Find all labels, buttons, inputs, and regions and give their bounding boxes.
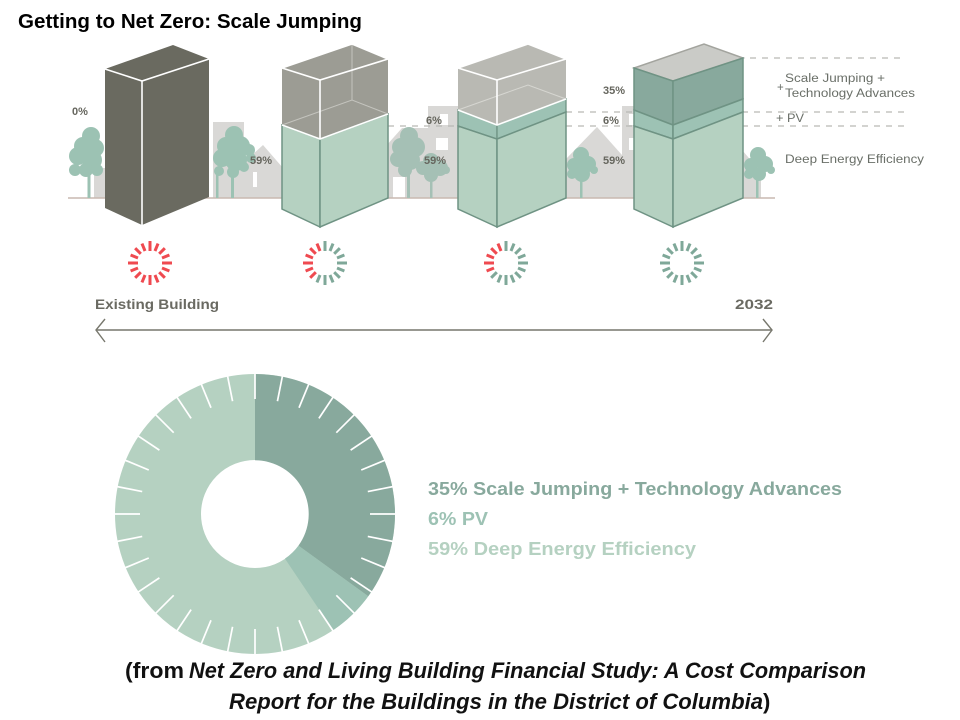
- progress gauge 4: all green: [660, 241, 704, 285]
- source caption: ): [763, 689, 770, 714]
- key labels, right of buildings: [776, 73, 924, 166]
- timeline end label: 2032: [735, 296, 773, 312]
- percentage labels on buildings: 59%: [250, 155, 272, 167]
- building 3: efficiency plus PV: [458, 44, 566, 227]
- donut legend: 35% Scale Jumping + Technology Advances: [428, 479, 842, 499]
- white tick marks: [114, 373, 396, 655]
- source caption: (from: [125, 658, 184, 683]
- trees: [69, 126, 775, 198]
- percentage labels on buildings: [72, 85, 625, 167]
- percentage labels on buildings: 35%: [603, 85, 625, 97]
- segment: 6% PV: [285, 546, 368, 630]
- percentage labels on buildings: 59%: [603, 155, 625, 167]
- donut chart: [114, 373, 396, 655]
- building 1: existing building: [105, 45, 209, 225]
- progress gauge 1: all red: [128, 241, 172, 285]
- percentage labels on buildings: 6%: [426, 115, 442, 127]
- segment: 59% deep energy efficiency: [158, 417, 352, 611]
- percentage labels on buildings: 6%: [603, 115, 619, 127]
- donut legend: 6% PV: [428, 509, 488, 529]
- dashed level lines: [388, 58, 905, 126]
- key labels, right of buildings: +: [777, 82, 784, 94]
- key labels, right of buildings: Scale Jumping +: [785, 73, 885, 85]
- key labels, right of buildings: Technology Advances: [785, 88, 915, 100]
- source caption: [125, 658, 866, 714]
- title: Getting to Net Zero: Scale Jumping: [18, 11, 362, 33]
- key labels, right of buildings: + PV: [776, 113, 804, 125]
- progress gauge 3: 65% green: [484, 241, 528, 285]
- progress gauge 2: 59% green: [303, 241, 347, 285]
- percentage labels on buildings: 59%: [424, 155, 446, 167]
- source caption: Net Zero and Living Building Financial Study: A Cost Comparison: [189, 658, 866, 683]
- donut legend: 59% Deep Energy Efficiency: [428, 539, 696, 559]
- donut legend: [428, 479, 842, 559]
- ground line: [68, 197, 775, 199]
- segment: 35% scale jumping: [255, 374, 395, 596]
- background neighbourhood silhouettes: [94, 106, 761, 198]
- percentage labels on buildings: 0%: [72, 106, 88, 118]
- timeline arrow: [96, 319, 772, 342]
- key labels, right of buildings: Deep Energy Efficiency: [785, 154, 924, 166]
- timeline start label: Existing Building: [95, 296, 219, 312]
- source caption: Report for the Buildings in the District of Columbia: [229, 689, 763, 714]
- building 2: 59% efficiency: [282, 44, 388, 227]
- building 4: net zero 2032: [634, 44, 743, 227]
